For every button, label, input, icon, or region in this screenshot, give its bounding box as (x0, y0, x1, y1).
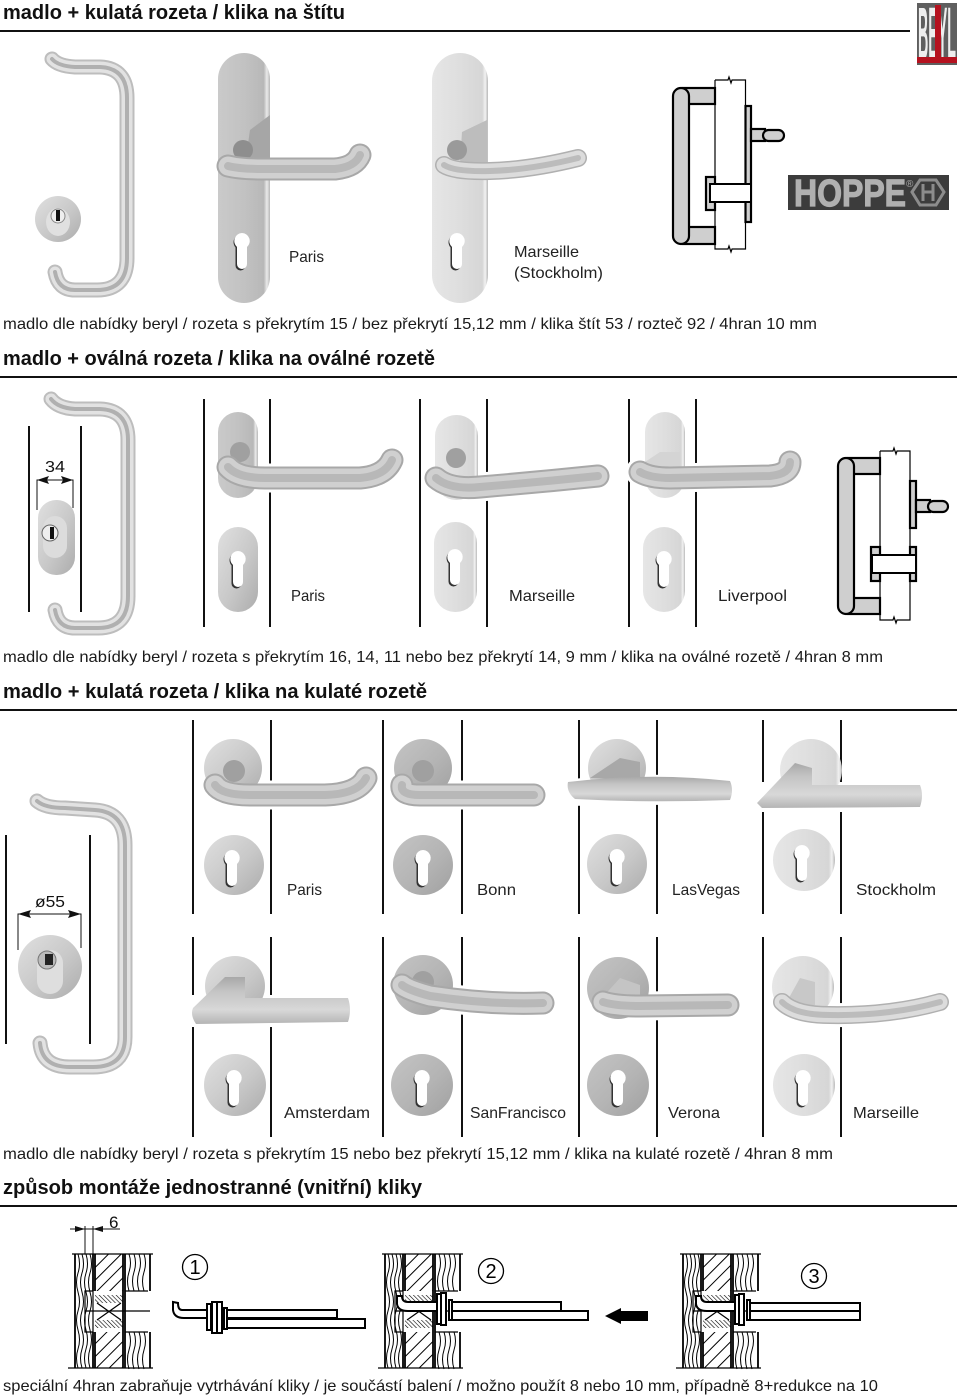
handle assembly: step 3 (696, 1294, 860, 1325)
handle assembly: step 1 (173, 1302, 365, 1333)
caption: mounting note: speciální 4hran zabraňuje vytrhávání kliky / je součástí balení / možno použít 8 nebo 10 mm, případně 8+redukce na 10 (3, 1378, 878, 1395)
label: Paris: Paris (291, 588, 325, 605)
section drawing: oval rosette mounting (838, 448, 948, 623)
label: Marseille (Stockholm) (514, 244, 603, 282)
handle assembly: step 2 (397, 1293, 588, 1325)
logo: HOPPE: ® (906, 179, 914, 190)
dimension: 6 (70, 1213, 120, 1254)
oval rosette handle: Liverpool (630, 412, 790, 612)
label: Marseille (Stockholm): (Stockholm) (514, 265, 603, 282)
step marker: 2 (478, 1258, 504, 1284)
label: Liverpool: Liverpool (718, 588, 787, 605)
section drawing: plate mounting (673, 77, 784, 252)
dimension: ø55 (18, 894, 81, 950)
caption: section 2: madlo dle nabídky beryl / rozeta s překrytím 16, 14, 11 nebo bez překrytí 14, 9 mm / klika na oválné rozetě / 4hran 8 mm (3, 649, 883, 666)
oval rosette handle: Marseille (434, 415, 598, 612)
icon: round lock rosette (18, 935, 82, 999)
step marker: 2: 2 (485, 1261, 497, 1283)
arrow (605, 1308, 648, 1324)
step marker: 1: 1 (189, 1257, 201, 1279)
icon: round lock rosette (35, 196, 81, 242)
pull handle: section 2 (51, 399, 128, 628)
logo: HOPPE: HOPPE (794, 173, 906, 215)
heading: madlo + kulatá rozeta / klika na kulaté rozetě: madlo + kulatá rozeta / klika na kulaté rozetě (3, 681, 427, 703)
label: Bonn: Bonn (477, 882, 516, 899)
label: Paris: Paris (287, 882, 322, 899)
caption: section 1: madlo dle nabídky beryl / rozeta s překrytím 15 / bez překrytí 15,12 mm / klika štít 53 / rozteč 92 / 4hran 10 mm (3, 316, 817, 333)
dimension: 34 (37, 459, 73, 510)
handle: Paris (round) (204, 739, 366, 895)
label: Paris: Paris (289, 249, 324, 266)
step marker: 1 (182, 1254, 208, 1280)
wall section: step 3 (676, 1254, 761, 1369)
label: Marseille: Marseille (853, 1105, 919, 1122)
oval rosette handle: Paris (218, 412, 392, 612)
label: Stockholm: Stockholm (856, 882, 936, 899)
heading: madlo + kulatá rozeta / klika na štítu: madlo + kulatá rozeta / klika na štítu (3, 2, 345, 24)
dimension: ø55: ø55 (35, 894, 65, 911)
pull handle: section 3 (37, 801, 125, 1067)
pull handle: section 1 (52, 59, 127, 290)
step marker: 3: 3 (808, 1266, 820, 1288)
icon: oval lock rosette (38, 500, 75, 575)
caption: section 3: madlo dle nabídky beryl / rozeta s překrytím 15 nebo bez překrytí 15,12 mm / klika na kulaté rozetě / 4hran 8 mm (3, 1146, 833, 1163)
wall section: step 1 (68, 1254, 153, 1369)
door plate handle: Marseille (432, 53, 578, 303)
dimension: 34: 34 (45, 459, 65, 476)
handle: Bonn (393, 739, 534, 895)
handle: Verona (587, 957, 728, 1116)
dimension: 6: 6 (109, 1213, 118, 1232)
handle: SanFrancisco (391, 955, 543, 1116)
label: Marseille (Stockholm): Marseille (514, 244, 579, 261)
handle: LasVegas (560, 739, 738, 894)
label: SanFrancisco: SanFrancisco (470, 1105, 566, 1122)
label: LasVegas: LasVegas (672, 882, 740, 899)
door plate handle: Paris (218, 53, 360, 303)
handle: Amsterdam (188, 956, 354, 1116)
label: Amsterdam: Amsterdam (284, 1105, 370, 1122)
wall section: step 2 (378, 1254, 463, 1369)
heading: madlo + oválná rozeta / klika na oválné rozetě: madlo + oválná rozeta / klika na oválné rozetě (3, 348, 435, 370)
label: Verona: Verona (668, 1105, 720, 1122)
heading: způsob montáže jednostranné (vnitřní) kliky: způsob montáže jednostranné (vnitřní) kliky (3, 1177, 423, 1199)
handle: Marseille (round) (772, 956, 940, 1116)
handle: Stockholm (752, 739, 927, 891)
step marker: 3 (802, 1264, 826, 1288)
label: Marseille: Marseille (509, 588, 575, 605)
